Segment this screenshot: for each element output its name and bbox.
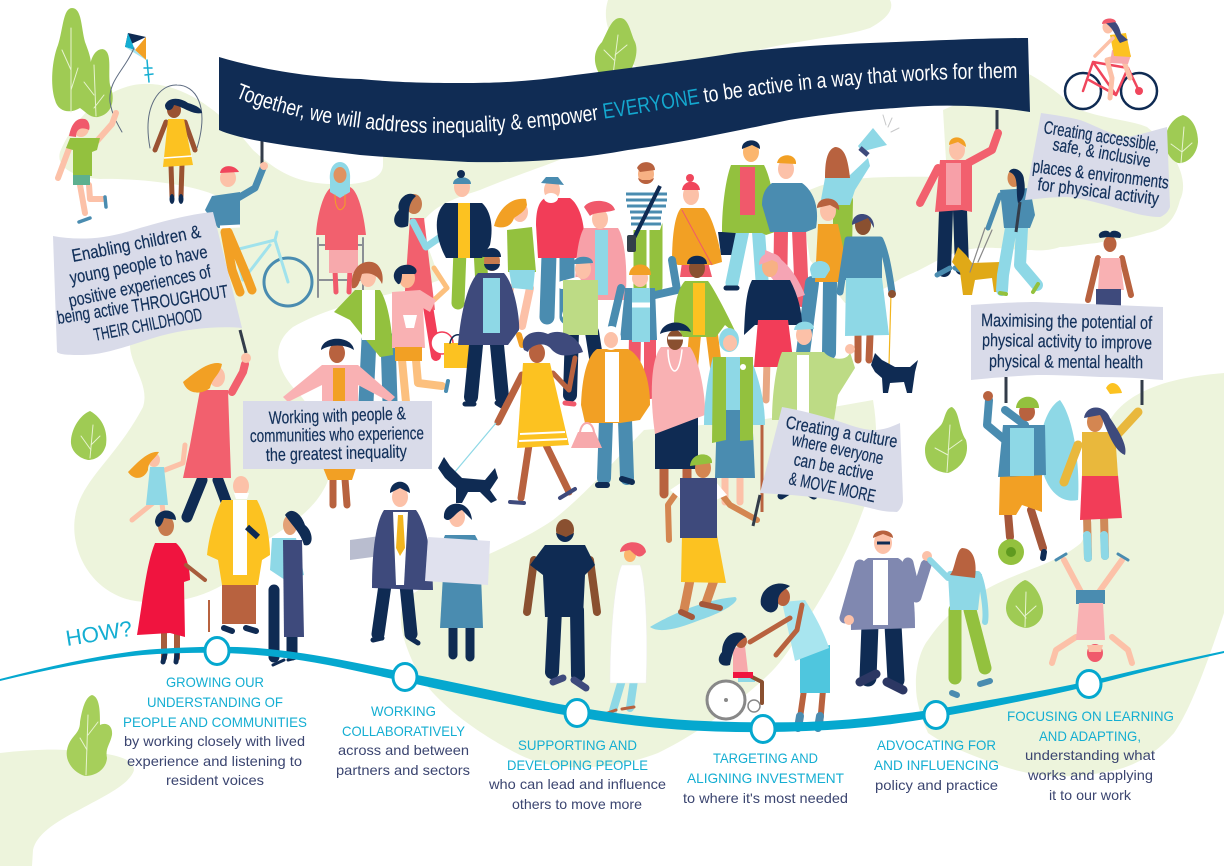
text block: growing our understanding: experience and listening to xyxy=(127,753,302,769)
text block: growing our understanding: PEOPLE AND COMMUNITIES xyxy=(123,714,307,730)
text block: targeting and aligning: TARGETING AND xyxy=(713,750,818,766)
text block: targeting and aligning: ALIGNING INVESTMENT xyxy=(687,770,844,786)
figure: person in orange hat waving xyxy=(610,260,677,393)
figure: man in navy jacket xyxy=(437,170,492,303)
figure: man in green jacket and yellow top xyxy=(674,256,737,367)
figure: older woman in green vest xyxy=(704,328,765,512)
tree: top left xyxy=(52,8,113,117)
figure: girl flying kite xyxy=(58,113,116,222)
placard: communities: the greatest inequality xyxy=(266,441,407,465)
figure: child doing handstand xyxy=(1052,554,1132,663)
banner text: Together, we will address inequality & empower EVERYONE to be active in a way that works for them xyxy=(239,62,1016,138)
text block: targeting and aligning xyxy=(683,750,848,806)
figure: man in lime jacket waving xyxy=(772,322,855,496)
placard: culture: & MOVE MORE xyxy=(787,468,877,506)
placard: physical and mental health: physical activity to improve xyxy=(982,330,1152,353)
placard: physical and mental health xyxy=(971,302,1163,380)
figure: woman in red dress xyxy=(137,510,205,662)
figure: woman in cat t-shirt xyxy=(392,265,448,402)
text block: advocating: AND INFLUENCING xyxy=(874,757,999,773)
placard: children and young people: THEIR CHILDHOOD xyxy=(92,304,204,345)
placard: culture: can be active xyxy=(792,449,876,484)
figure: man in lime vest with cap xyxy=(562,257,598,404)
text block: working collaboratively: across and between xyxy=(338,742,469,758)
placard: places and environments: safe, & inclusive xyxy=(1051,134,1152,171)
figure: man in coral jacket xyxy=(920,110,998,275)
figure: woman in navy top and red skirt xyxy=(744,250,805,400)
placard: physical and mental health: Maximising the potential of xyxy=(981,310,1153,333)
figure: woman in pink vest xyxy=(1088,231,1131,394)
text block: supporting and developing xyxy=(488,737,666,812)
text block: supporting and developing: DEVELOPING PEOPLE xyxy=(507,757,648,773)
figure: child in wheelchair xyxy=(707,632,762,719)
placard: places and environments: Creating accessible, xyxy=(1042,117,1161,155)
figure: man in blue jacket xyxy=(762,155,817,300)
figure: woman in coral holding child xyxy=(165,330,251,517)
placard: children and young people: Enabling children & xyxy=(70,221,202,266)
placard: children and young people xyxy=(53,212,242,355)
figure: woman in blue top with dog lead xyxy=(840,214,896,365)
figure: older woman in orange cardigan xyxy=(571,326,650,485)
figure: woman in pink jacket xyxy=(575,201,626,300)
figure: woman in coral dress xyxy=(394,194,452,356)
text block: growing our understanding xyxy=(123,674,307,788)
figure: woman with arms wide xyxy=(283,339,395,505)
text block: supporting and developing: others to move more xyxy=(512,796,642,812)
text block: working collaboratively xyxy=(336,703,470,778)
text block: working collaboratively: COLLABORATIVELY xyxy=(342,723,466,739)
figure: man with glasses xyxy=(844,530,932,690)
placard: children and young people: young people to have xyxy=(68,242,209,288)
figure: man in green jacket xyxy=(722,140,775,288)
placard: communities xyxy=(243,401,432,469)
text block: working collaboratively: partners and sectors xyxy=(336,762,470,778)
heading: HOW?: HOW? xyxy=(64,616,134,651)
text block: growing our understanding: UNDERSTANDING OF xyxy=(147,694,283,710)
text block: supporting and developing: SUPPORTING AND xyxy=(518,737,637,753)
icon: spotted dog xyxy=(438,457,498,503)
placard: places and environments xyxy=(1025,113,1170,217)
journey line xyxy=(0,647,1224,732)
text block: growing our understanding: GROWING OUR xyxy=(166,674,264,690)
figure: woman with apron and tablet xyxy=(270,511,312,665)
figure: woman in pink top with sunglasses xyxy=(652,322,705,494)
icon: kite xyxy=(110,33,153,132)
placard: physical and mental health: physical & mental health xyxy=(989,351,1143,372)
figure: older man in yellow coat xyxy=(207,476,270,632)
text block: advocating xyxy=(874,737,999,793)
figure: girl with skipping rope xyxy=(148,85,202,204)
figure: skateboarder xyxy=(650,454,760,630)
figure: bald man with beard xyxy=(527,519,597,688)
text block: working collaboratively: WORKING xyxy=(371,703,436,719)
figure: woman with orange hair and green top xyxy=(494,199,536,345)
figure: man with turban xyxy=(458,248,519,408)
figure: woman in green jacket xyxy=(334,262,393,402)
journey markers xyxy=(205,638,1101,742)
text block: advocating: ADVOCATING FOR xyxy=(877,737,996,753)
placard: places and environments: places & environments xyxy=(1032,156,1170,193)
placard: culture: where everyone xyxy=(789,429,885,468)
placard: communities: communities who experience xyxy=(250,423,424,446)
figure: woman helping child xyxy=(750,583,830,728)
figure: man in suit with plans xyxy=(350,482,433,643)
placard: children and young people: positive experiences of xyxy=(67,261,213,311)
figure: woman with white cane xyxy=(988,169,1038,294)
text block: targeting and aligning: to where it's most needed xyxy=(683,790,848,806)
text block: focusing on learning xyxy=(1007,708,1174,803)
text block: supporting and developing: who can lead and influence xyxy=(488,776,666,792)
placard: places and environments: for physical activity xyxy=(1037,174,1160,209)
text block: growing our understanding: resident voices xyxy=(166,772,264,788)
banner pole left xyxy=(260,140,264,165)
figure: woman in yellow jumper xyxy=(1064,380,1142,558)
text block: focusing on learning: it to our work xyxy=(1049,787,1132,803)
text block: focusing on learning: understanding what xyxy=(1025,747,1155,763)
figure: cyclist top right xyxy=(1065,18,1157,109)
figure: cyclist with banner pole xyxy=(205,162,312,306)
text block: focusing on learning: FOCUSING ON LEARNING xyxy=(1007,708,1174,724)
figure: woman in orange sweater xyxy=(672,174,737,277)
placard: culture: Creating a culture xyxy=(784,412,899,452)
placard: communities: Working with people & xyxy=(268,403,406,428)
figure: man with football xyxy=(983,377,1078,565)
figure: woman in yellow dress xyxy=(454,332,583,503)
icon: black dog right xyxy=(871,353,918,393)
icon: racket and yellow bag xyxy=(431,332,472,368)
figure: woman with megaphone xyxy=(820,115,899,267)
text block: focusing on learning: AND ADAPTING, xyxy=(1039,728,1141,744)
text block: focusing on learning: works and applying xyxy=(1027,767,1153,783)
figure: woman in white coat xyxy=(602,542,647,715)
figure: woman with hijab and walking frame xyxy=(316,162,366,297)
text block: advocating: policy and practice xyxy=(875,777,998,793)
figure: woman in green trousers xyxy=(930,548,990,695)
figure: woman with poster xyxy=(425,504,490,657)
placard: children and young people: being active THROUGHOUT xyxy=(55,281,229,328)
figure: man in striped top xyxy=(625,162,668,287)
banner xyxy=(219,38,1030,162)
figure: woman in orange top with handbag xyxy=(803,198,848,353)
text block: growing our understanding: by working closely with lived xyxy=(124,733,305,749)
placard: culture xyxy=(760,407,903,512)
figure: small child xyxy=(128,452,168,522)
figure: older man in red sweater xyxy=(536,177,584,317)
figure: guide dog xyxy=(952,228,1000,295)
